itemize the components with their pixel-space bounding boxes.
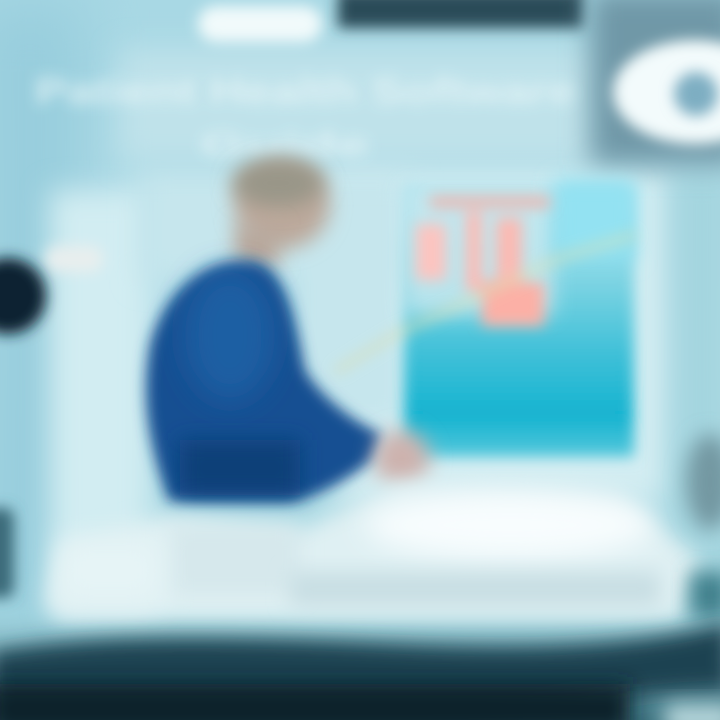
trend line [335,235,635,372]
title text, blurred [35,71,575,164]
top pill shape [198,6,322,42]
blue gown [146,262,382,502]
top dark bar [338,0,584,28]
person [146,159,430,502]
left bottom dark edge [0,508,14,598]
dark foreground [0,622,720,720]
eye icon top right [590,0,720,165]
left hand silhouette [0,246,103,334]
hand [374,430,430,486]
title text, blurred: Patient Health Software [35,71,575,113]
right side device [686,434,720,618]
chart on screen [416,196,550,326]
bed [45,482,700,620]
head [232,159,330,267]
monitor screen [335,180,635,457]
title text, blurred: Guide [200,126,370,164]
